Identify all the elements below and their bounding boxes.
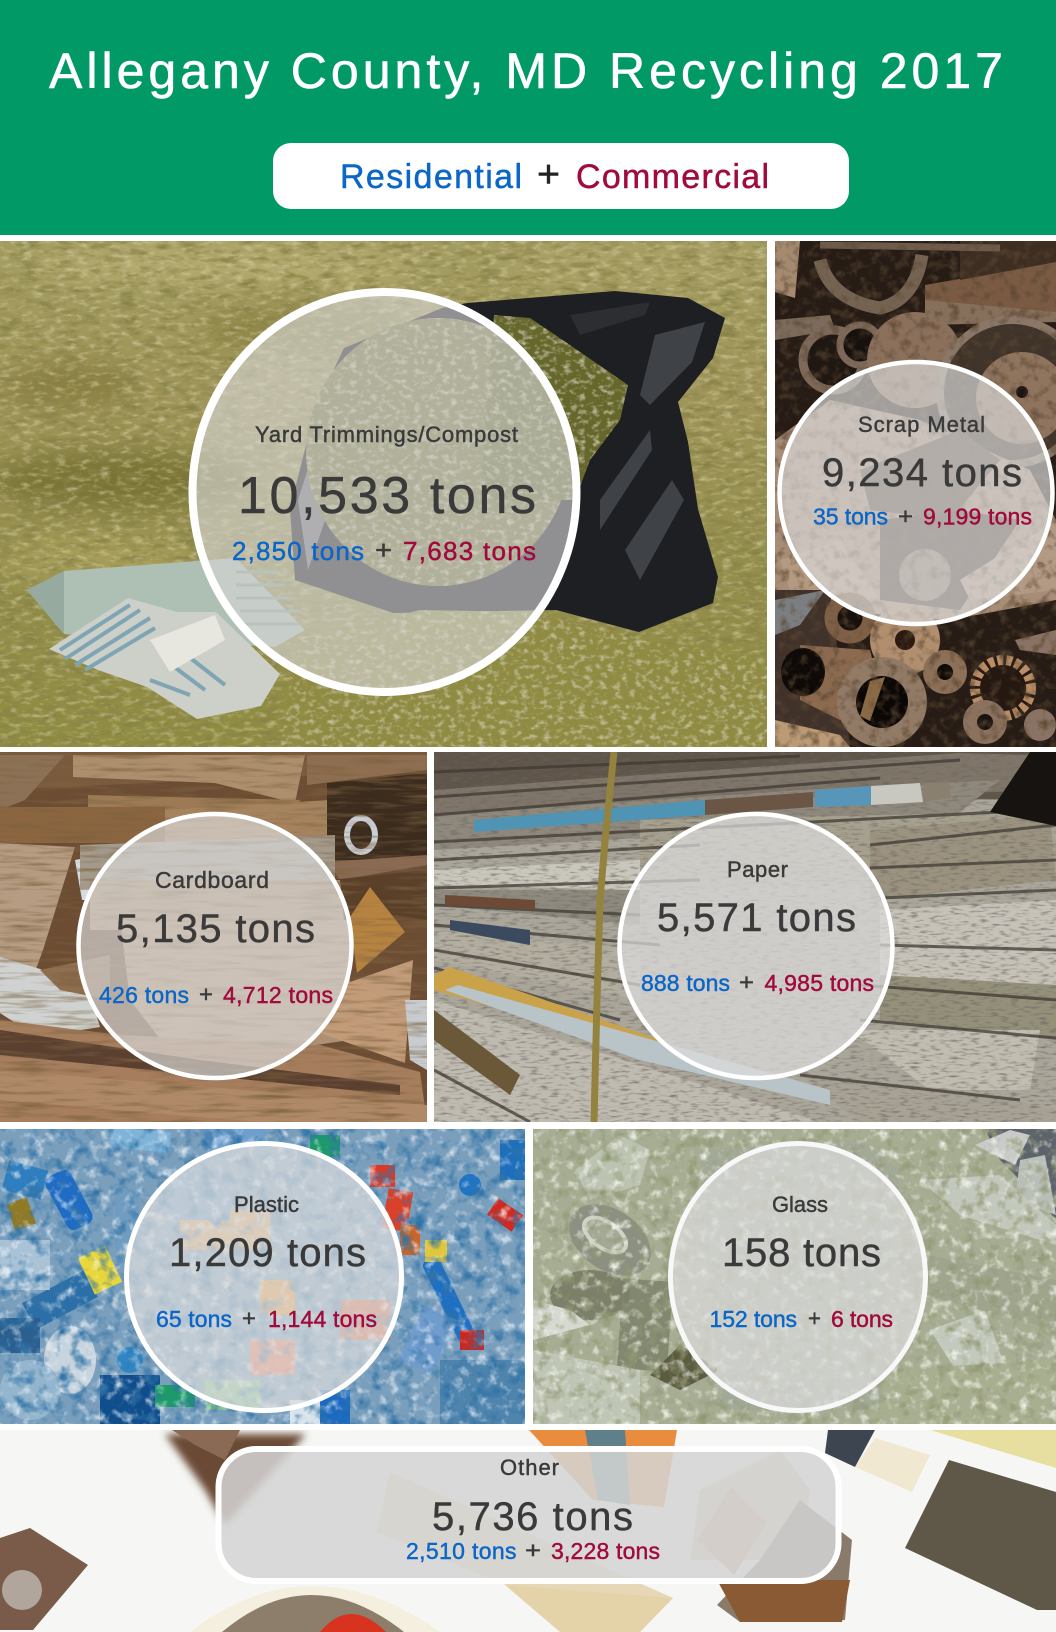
category name: Yard Trimmings/Compost: [255, 422, 518, 447]
legend: residential + commercial: +: [537, 154, 560, 196]
split tons: 152 tons: [710, 1306, 797, 1332]
split tons: 9,199 tons: [923, 504, 1032, 530]
overlay circle: [780, 362, 1052, 624]
glove: [49, 598, 280, 719]
category name: Glass: [772, 1192, 828, 1217]
total tons: 1,209 tons: [169, 1231, 366, 1275]
split tons: 35 tons: [813, 504, 888, 530]
total tons: 5,736 tons: [432, 1495, 633, 1539]
board: [27, 558, 305, 647]
photo: bundled newspapers: [434, 752, 1056, 1122]
garbage bag: [290, 291, 725, 632]
split tons: +: [525, 1537, 541, 1563]
split tons: [813, 503, 1032, 530]
split tons: [406, 1537, 660, 1564]
split tons: 4,712 tons: [223, 982, 333, 1008]
split tons: +: [199, 981, 213, 1007]
overlay rounded box: [218, 1449, 838, 1581]
split tons: +: [375, 535, 392, 565]
category name: Scrap Metal: [858, 412, 985, 437]
overlay circle: [78, 814, 352, 1078]
legend: residential + commercial: Commercial: [576, 158, 769, 196]
split tons: +: [808, 1305, 821, 1331]
split tons: 1,144 tons: [268, 1306, 377, 1332]
split tons: 7,683 tons: [403, 536, 536, 566]
photo: glass bottles: [533, 1129, 1056, 1424]
split tons: [710, 1305, 893, 1332]
photo: rusty metal parts: [775, 241, 1056, 747]
grass foreground: [280, 610, 767, 747]
overlay circle: [126, 1144, 402, 1410]
split tons: 65 tons: [156, 1306, 232, 1332]
panel: glass: [533, 1129, 1056, 1424]
split tons: 3,228 tons: [551, 1538, 660, 1564]
total tons: 5,571 tons: [657, 896, 856, 940]
split tons: +: [898, 503, 913, 529]
total tons: 9,234 tons: [822, 451, 1022, 495]
split tons: 888 tons: [641, 970, 730, 996]
split tons: [641, 969, 874, 996]
split tons: +: [242, 1305, 256, 1331]
legend: residential + commercial: [273, 143, 849, 209]
panel: paper: [434, 752, 1056, 1122]
panel: yard trimmings: [0, 241, 780, 747]
panel: scrap metal: [775, 241, 1056, 747]
photo: grass, bag and glove: [0, 241, 780, 747]
total tons: 158 tons: [722, 1231, 881, 1275]
overlay circle: [620, 814, 892, 1078]
split tons: 2,510 tons: [406, 1538, 516, 1564]
category name: Paper: [727, 857, 788, 882]
total tons: 10,533 tons: [238, 467, 536, 525]
total tons: 5,135 tons: [116, 907, 315, 951]
split tons: [232, 535, 536, 566]
legend: residential + commercial: Residential: [340, 158, 522, 196]
category name: Other: [500, 1455, 559, 1480]
split tons: 4,985 tons: [764, 970, 874, 996]
photo: cardboard stacks: [0, 752, 427, 1122]
category name: Cardboard: [155, 867, 269, 893]
overlay circle: [670, 1144, 926, 1410]
split tons: 2,850 tons: [232, 536, 364, 566]
header band: [0, 0, 1056, 235]
split tons: [99, 981, 333, 1008]
overlay circle: [192, 292, 576, 692]
photo: assorted objects: [0, 1430, 1056, 1632]
hay: [306, 315, 628, 586]
panel: cardboard: [0, 752, 427, 1122]
split tons: 426 tons: [99, 982, 189, 1008]
split tons: +: [739, 969, 754, 995]
category name: Plastic: [234, 1192, 299, 1217]
panel: other: [0, 1430, 1056, 1632]
photo: plastic bottles: [0, 1127, 525, 1424]
panel: plastic: [0, 1127, 525, 1424]
title: Allegany County, MD Recycling 2017: [49, 43, 1003, 99]
split tons: [156, 1305, 377, 1332]
split tons: 6 tons: [831, 1306, 893, 1332]
